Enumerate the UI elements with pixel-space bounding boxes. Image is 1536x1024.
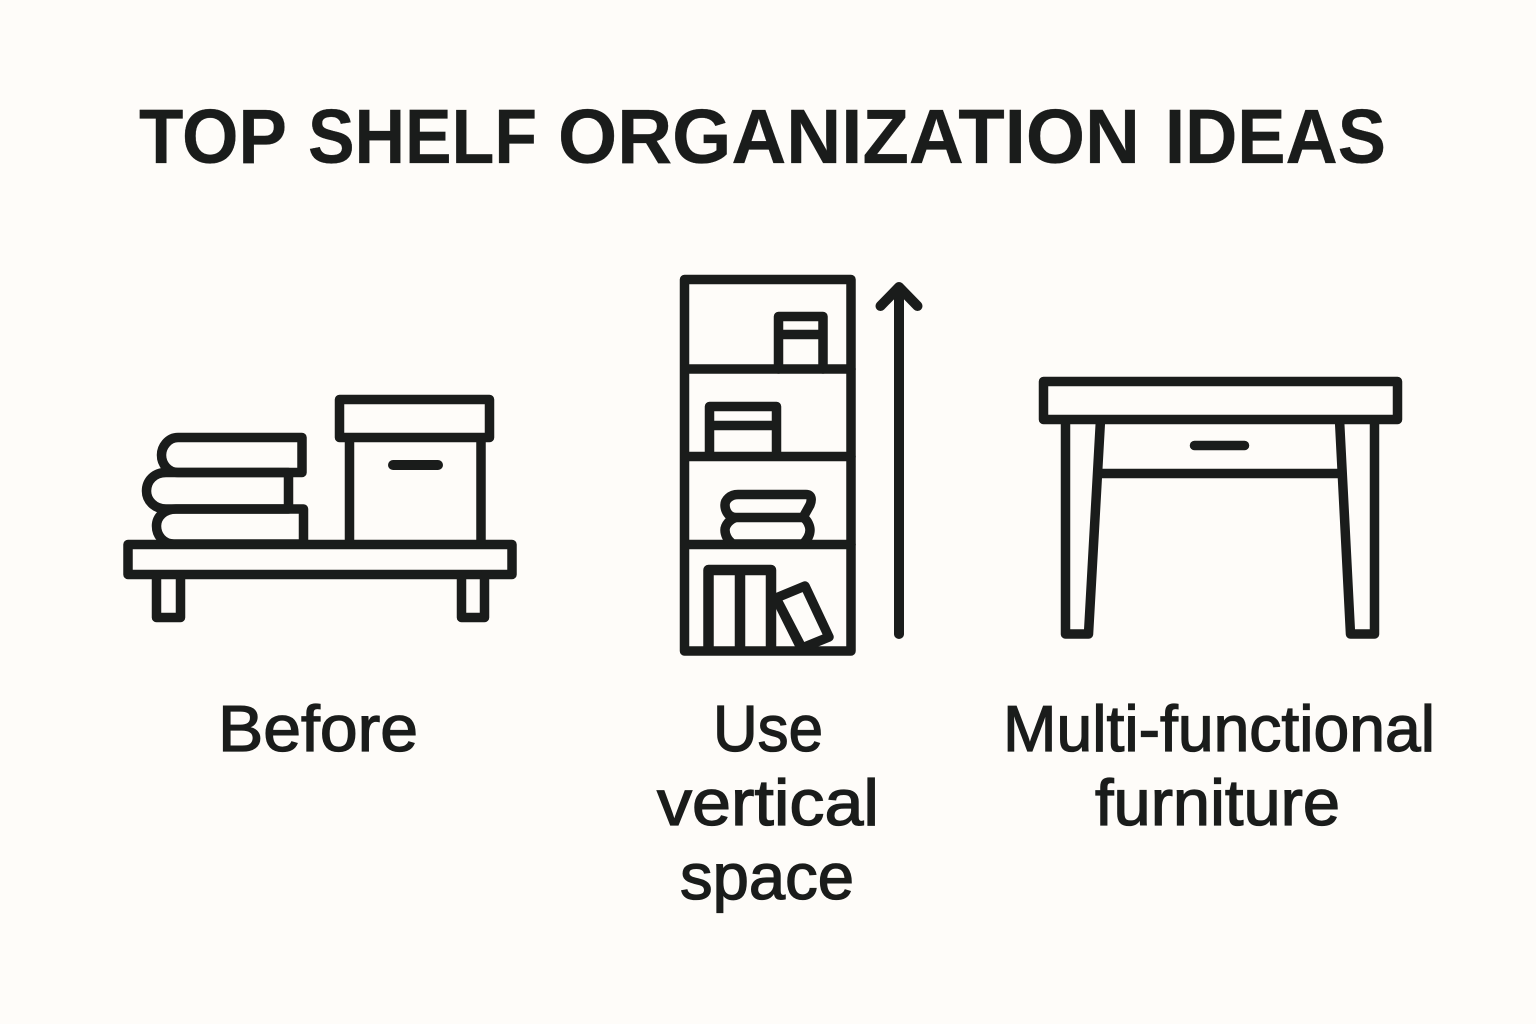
icon: top storage box — [778, 316, 823, 369]
icon: stacked books — [725, 494, 811, 544]
icon: middle book — [146, 472, 288, 509]
label: multi-functional furniture: furniture — [1095, 766, 1340, 839]
label: use vertical space: Use — [713, 692, 823, 765]
icon: crossbar — [1098, 469, 1342, 478]
arrow: upward — [880, 287, 918, 634]
label: before: Before — [218, 692, 418, 765]
title — [139, 94, 1386, 180]
title: IDEAS — [1165, 94, 1386, 180]
icon: box handle — [393, 460, 438, 470]
icon: bookcase frame — [684, 280, 851, 651]
icon: left table leg — [1066, 420, 1100, 634]
icon: box body — [350, 438, 481, 544]
title: SHELF — [308, 94, 537, 180]
panel: before icon — [128, 400, 512, 618]
icon: table top — [1044, 382, 1398, 420]
label: use vertical space: vertical — [657, 766, 879, 839]
icon: shelf board — [128, 544, 512, 574]
panel: vertical space icon — [684, 280, 918, 651]
panel: multi-functional furniture icon — [1044, 382, 1398, 634]
icon: tilted book — [776, 586, 829, 648]
icon: right table leg — [1340, 420, 1374, 634]
title: TOP — [139, 94, 287, 180]
icon: drawer handle — [1194, 441, 1244, 450]
icon: second storage box — [710, 406, 776, 456]
icon: bottom book — [156, 509, 304, 544]
icon: box lid — [340, 400, 490, 438]
label: use vertical space — [657, 692, 879, 913]
icon: upright books — [708, 570, 771, 650]
label: multi-functional furniture — [1003, 692, 1435, 839]
icon: left shelf leg — [156, 575, 180, 618]
label: use vertical space: space — [680, 840, 854, 913]
title: ORGANIZATION — [558, 94, 1140, 180]
icon: right shelf leg — [462, 575, 484, 618]
label: multi-functional furniture: Multi-functional — [1003, 692, 1435, 765]
icon: top book — [162, 438, 302, 472]
icon: bookcase shelves — [685, 369, 851, 544]
